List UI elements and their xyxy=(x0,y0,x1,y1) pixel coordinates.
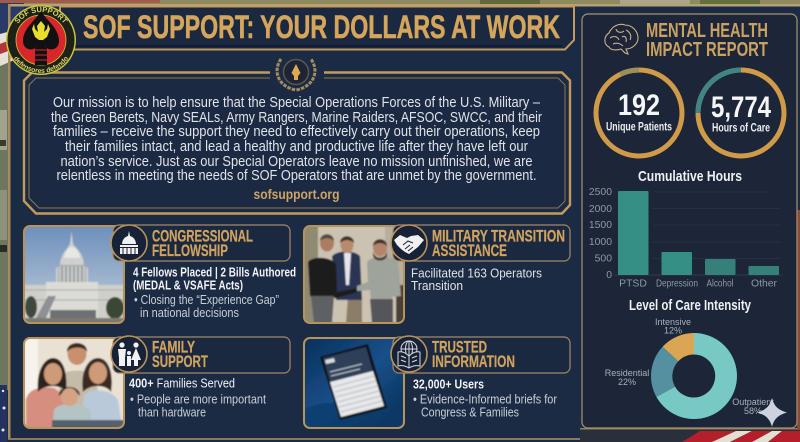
donut chart: level of care: 22% xyxy=(618,377,636,387)
bar chart: cumulative hours: 2000 xyxy=(589,204,612,215)
header: family support xyxy=(111,336,290,373)
photo: US Capitol xyxy=(24,226,124,323)
donut chart: level of care: Residential xyxy=(605,368,649,378)
stat: hours of care: 5,774 xyxy=(711,91,771,124)
icon: laurel emblem xyxy=(277,59,315,90)
header: family support: SUPPORT xyxy=(152,353,208,371)
text: mission xyxy=(51,95,542,184)
text: family details: • People are more important xyxy=(130,392,266,406)
text: mission: Our mission is to help ensure that the Special Operations Forces of the U.S. Military – xyxy=(53,95,541,111)
header: trusted information xyxy=(391,336,570,373)
text: family details: than hardware xyxy=(138,404,206,420)
icon: globe and book xyxy=(391,336,427,372)
bar chart: cumulative hours: 0 xyxy=(606,270,612,281)
panel: congressional fellowship xyxy=(24,225,296,323)
stat: unique patients: 192 xyxy=(618,89,660,122)
link: website: sofsupport.org xyxy=(254,186,340,202)
title banner xyxy=(60,6,574,50)
text: information details: 32,000+ Users xyxy=(413,376,484,392)
text: fellowship details: in national decisions xyxy=(140,305,239,320)
text: transition details: Facilitated 163 Operators xyxy=(411,266,542,280)
stat: hours of care: Hours of Care xyxy=(712,122,770,134)
text: transition details xyxy=(411,266,542,293)
header: congressional fellowship: FELLOWSHIP xyxy=(152,242,228,260)
icon: handshake xyxy=(391,225,427,261)
bar chart: cumulative hours: Other xyxy=(751,278,778,290)
panel: mental health impact report xyxy=(582,14,797,428)
icon: brain xyxy=(605,24,638,54)
donut chart: level of care: 12% xyxy=(664,326,682,336)
stripes: flag corner bottom right xyxy=(580,14,800,442)
icon: capitol dome xyxy=(111,225,147,261)
bar chart: cumulative hours: 1500 xyxy=(589,220,612,231)
bar chart: cumulative hours: Depression xyxy=(656,278,698,290)
heading: SOF SUPPORT: YOUR DOLLARS AT WORK xyxy=(83,9,560,45)
bar chart: cumulative hours: 500 xyxy=(595,254,612,264)
heading xyxy=(646,20,768,61)
panel: trusted information xyxy=(304,336,570,428)
panel: mission statement xyxy=(24,59,570,214)
stat: unique patients xyxy=(596,70,682,156)
text: mission: their families intact, and lead a healthy and productive life after they have left our xyxy=(65,139,528,155)
text: information details: Congress & Families xyxy=(421,404,519,420)
text: information details xyxy=(413,376,558,420)
header: military transition: ASSISTANCE xyxy=(432,242,507,260)
header: military transition xyxy=(391,225,570,261)
logo: SOF Support seal: SOF SUPPORT xyxy=(14,6,68,24)
panel: military transition assistance xyxy=(304,225,570,323)
heading text: FAMILY xyxy=(152,338,195,356)
photo: tablet report xyxy=(304,338,404,428)
donut chart: level of care xyxy=(605,317,774,419)
text: transition details: Transition xyxy=(411,278,463,293)
text: fellowship details: (MEDAL & VSAFE Acts) xyxy=(133,278,243,292)
header: congressional fellowship xyxy=(111,225,290,261)
text: family details xyxy=(129,376,266,420)
heading text: MILITARY TRANSITION xyxy=(432,228,565,246)
icon: sparkle xyxy=(757,398,787,427)
text: fellowship details: • Closing the “Experience Gap” xyxy=(134,292,279,307)
text: mission: relentless in meeting the needs of SOF Operators that are unmet by the government. xyxy=(56,168,536,184)
donut chart: level of care: 58% xyxy=(744,406,762,416)
text: fellowship details xyxy=(133,264,296,320)
heading text: CONGRESSIONAL xyxy=(152,228,253,246)
stat: unique patients: Unique Patients xyxy=(606,122,672,134)
text: family details: 400+ Families Served xyxy=(129,376,235,390)
text: mission: families – receive the support they need to effectively carry out their operations, keep xyxy=(53,124,540,140)
heading: level of care: Level of Care Intensity xyxy=(629,297,751,314)
photo: family xyxy=(24,338,124,428)
header: trusted information: INFORMATION xyxy=(432,353,515,371)
heading: cumulative hours: Cumulative Hours xyxy=(638,168,742,185)
text: mission: nation’s service. Just as our Special Operators leave no mission unfinished, we are xyxy=(60,154,532,170)
stat: hours of care xyxy=(698,70,784,156)
text: fellowship details: 4 Fellows Placed | 2 Bills Authored xyxy=(133,264,296,280)
bar chart: cumulative hours: 1000 xyxy=(589,237,612,248)
panel: family support xyxy=(24,336,290,428)
bar chart: cumulative hours xyxy=(589,187,782,290)
logo: SOF Support seal: defensores defendo xyxy=(14,57,68,73)
icon: family xyxy=(111,336,147,372)
heading text: TRUSTED xyxy=(432,338,487,356)
bar chart: cumulative hours: Alcohol xyxy=(706,278,734,290)
bar chart: cumulative hours: PTSD xyxy=(619,278,647,290)
text: information details: • Evidence-Informed briefs for xyxy=(413,392,558,406)
logo: SOF Support seal xyxy=(6,5,76,75)
photo: handshake xyxy=(304,226,404,323)
donut chart: level of care: Outpatient xyxy=(732,397,774,407)
text: mission: the Green Berets, Navy SEALs, Army Rangers, Marine Raiders, AFSOC, SWCC, and their xyxy=(51,110,542,126)
bar chart: cumulative hours: 2500 xyxy=(589,187,612,198)
donut chart: level of care: Intensive xyxy=(655,317,691,327)
